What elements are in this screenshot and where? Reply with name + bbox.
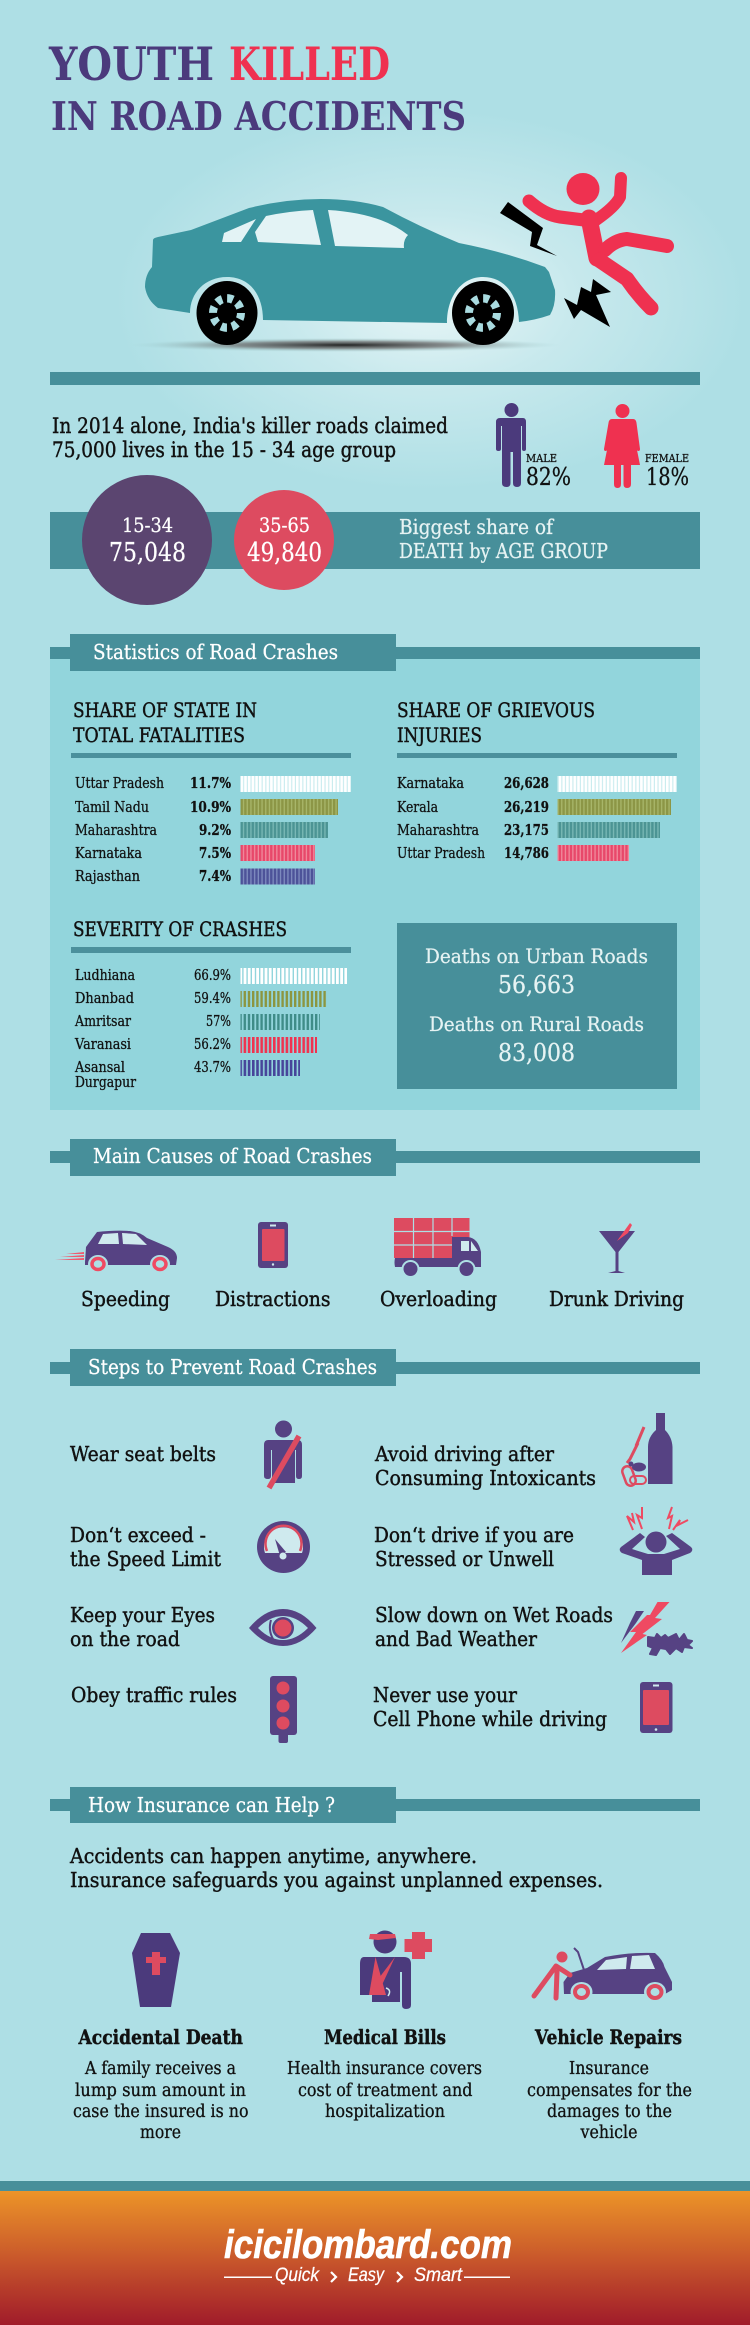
- chart: share of state in total fatalities: TOTAL FATALITIES: [73, 724, 245, 747]
- chart: share of grievous injuries: Karnataka: [397, 774, 464, 792]
- icon: person with seat belt: [264, 1420, 302, 1488]
- step: cell phone: [373, 1682, 672, 1733]
- insurance: vehicle repairs: Insurance: [569, 2059, 649, 2079]
- insurance: vehicle repairs: damages to the: [547, 2102, 672, 2122]
- impact bolts: [500, 202, 557, 256]
- male stat: 82%: [526, 463, 571, 491]
- intro statement: [52, 414, 448, 462]
- cause: distractions: Distractions: [215, 1287, 330, 1311]
- step: speed limit: the Speed Limit: [70, 1547, 222, 1571]
- icon: mobile phone: [640, 1682, 672, 1733]
- chart: share of grievous injuries: INJURIES: [397, 724, 482, 747]
- step: stressed or unwell: [374, 1507, 692, 1575]
- cause: overloading: [380, 1218, 497, 1311]
- section header: main causes: [50, 1139, 700, 1176]
- chart: severity of crashes: Dhanbad: [75, 989, 134, 1007]
- intro statement: 75,000 lives in the 15 - 34 age group: [52, 438, 396, 462]
- step: avoid intoxicants: [374, 1413, 672, 1490]
- chart: severity of crashes: Varanasi: [74, 1035, 131, 1053]
- insurance: accidental death: [73, 1933, 248, 2143]
- chart: share of state in total fatalities: 10.9%: [190, 798, 231, 816]
- chart: severity of crashes: Durgapur: [75, 1073, 137, 1091]
- cause: speeding: Speeding: [81, 1287, 170, 1311]
- step: seat belts: Wear seat belts: [70, 1442, 216, 1466]
- icon: male figure: [496, 403, 526, 487]
- insurance: medical bills: hospitalization: [325, 2102, 445, 2122]
- rear wheel: [196, 281, 258, 345]
- insurance: accidental death: case the insured is no: [73, 2102, 248, 2122]
- insurance: vehicle repairs: compensates for the: [527, 2081, 692, 2101]
- panel: statistics of road crashes: [50, 634, 700, 1110]
- icon: speeding car: [55, 1231, 177, 1273]
- chart: severity of crashes: [71, 918, 351, 1091]
- step: wet roads and bad weather: Slow down on Wet Roads: [375, 1603, 613, 1627]
- chart: share of state in total fatalities: SHARE OF STATE IN: [73, 699, 257, 722]
- car windows: [222, 210, 408, 248]
- icon: mobile phone: [258, 1222, 288, 1268]
- chart: share of state in total fatalities: Uttar Pradesh: [75, 774, 164, 792]
- circle: age 35-65: [234, 490, 334, 590]
- insurance intro: Insurance safeguards you against unplanned expenses.: [70, 1868, 603, 1892]
- insurance: medical bills: Medical Bills: [324, 2025, 446, 2049]
- step: avoid intoxicants: Consuming Intoxicants: [375, 1466, 596, 1490]
- circle: age 15-34: 75,048: [109, 538, 186, 568]
- circle: age 35-65: 35-65: [259, 513, 310, 537]
- icon: eye: [249, 1609, 316, 1646]
- chart: share of state in total fatalities: 7.4%: [199, 867, 231, 885]
- illustration: car hitting a pedestrian: [130, 173, 667, 352]
- female stat: 18%: [646, 463, 689, 491]
- icon: lightning and storm: [621, 1602, 692, 1655]
- female stat: FEMALE: [645, 452, 689, 465]
- title: [48, 37, 466, 140]
- title: KILLED: [229, 37, 390, 91]
- icon: martini glass: [599, 1223, 635, 1273]
- cause: overloading: Overloading: [380, 1287, 497, 1311]
- section header: steps to prevent: [50, 1349, 700, 1386]
- car shadow: [130, 338, 560, 352]
- male stat: [496, 403, 571, 491]
- step: eyes on the road: on the road: [70, 1627, 180, 1651]
- chart: share of grievous injuries: 26,628: [504, 774, 549, 792]
- step: traffic rules: Obey traffic rules: [71, 1683, 237, 1707]
- chart: share of grievous injuries: 26,219: [504, 798, 549, 816]
- section header: how insurance can help: [50, 1787, 700, 1823]
- tagline: [224, 2265, 510, 2286]
- cause: drunk driving: [549, 1223, 684, 1311]
- step: stressed or unwell: Stressed or Unwell: [375, 1547, 554, 1571]
- chart: severity of crashes: Asansal: [74, 1058, 125, 1076]
- front wheel: [452, 281, 514, 345]
- female stat: [604, 404, 689, 491]
- car body: [145, 199, 555, 323]
- insurance: medical bills: cost of treatment and: [298, 2081, 472, 2101]
- step: cell phone: Never use your: [373, 1683, 517, 1707]
- insurance: accidental death: more: [140, 2123, 181, 2143]
- tagline: Quick: [275, 2265, 320, 2286]
- section header: steps to prevent: Steps to Prevent Road Crashes: [88, 1355, 377, 1379]
- step: wet roads and bad weather: and Bad Weather: [375, 1627, 537, 1651]
- chart: share of grievous injuries: 23,175: [504, 821, 549, 839]
- section header: main causes: Main Causes of Road Crashes: [93, 1144, 372, 1168]
- chart: share of state in total fatalities: [71, 699, 351, 885]
- chart: share of state in total fatalities: Maharashtra: [75, 821, 157, 839]
- tagline: Easy: [348, 2265, 385, 2286]
- male stat: MALE: [526, 452, 557, 465]
- callout: urban and rural deaths: 83,008: [498, 1039, 575, 1067]
- chart: severity of crashes: 59.4%: [194, 989, 231, 1007]
- chart: share of state in total fatalities: 11.7%: [190, 774, 231, 792]
- divider bar: [50, 372, 700, 385]
- icon: injured person with medical cross: [360, 1930, 432, 2009]
- circle: age 35-65: 49,840: [247, 538, 322, 568]
- circle: age 15-34: [82, 475, 212, 605]
- icon: coffin: [132, 1933, 180, 2007]
- step: speed limit: [70, 1521, 310, 1573]
- insurance: medical bills: Health insurance covers: [287, 2059, 482, 2079]
- chart: share of grievous injuries: [397, 699, 677, 862]
- chart: severity of crashes: 56.2%: [194, 1035, 231, 1053]
- icon: stressed person: [620, 1507, 692, 1575]
- step: eyes on the road: Keep your Eyes: [70, 1603, 215, 1627]
- step: cell phone: Cell Phone while driving: [373, 1707, 607, 1731]
- intro statement: In 2014 alone, India's killer roads claimed: [52, 414, 448, 438]
- insurance: vehicle repairs: Vehicle Repairs: [534, 2025, 682, 2049]
- title: IN ROAD ACCIDENTS: [51, 94, 466, 140]
- chart: share of state in total fatalities: 9.2%: [199, 821, 231, 839]
- cause: distractions: [215, 1222, 330, 1311]
- insurance: accidental death: Accidental Death: [78, 2025, 243, 2049]
- chart: share of state in total fatalities: 7.5%: [199, 844, 231, 862]
- insurance: vehicle repairs: [527, 1948, 692, 2143]
- step: traffic rules: [71, 1676, 297, 1743]
- icon: person repairing car: [534, 1948, 672, 2002]
- chart: severity of crashes: 66.9%: [194, 966, 231, 984]
- chart: share of state in total fatalities: Rajasthan: [75, 867, 140, 885]
- chart: severity of crashes: 43.7%: [194, 1058, 231, 1076]
- step: speed limit: Don‘t exceed -: [70, 1523, 206, 1547]
- chart: share of state in total fatalities: Karnataka: [75, 844, 142, 862]
- cause: speeding: [55, 1231, 177, 1311]
- icon: bottle, syringe and pills: [621, 1413, 672, 1487]
- section header: statistics: Statistics of Road Crashes: [93, 640, 338, 664]
- band caption: DEATH by AGE GROUP: [399, 539, 608, 563]
- chart: severity of crashes: 57%: [206, 1012, 231, 1030]
- circle: age 15-34: 15-34: [122, 513, 173, 537]
- footer: [0, 2181, 750, 2325]
- step: eyes on the road: [70, 1603, 316, 1651]
- icon: female figure: [604, 404, 640, 488]
- chart: severity of crashes: Ludhiana: [75, 966, 135, 984]
- tagline: Smart: [414, 2265, 463, 2286]
- step: seat belts: [70, 1420, 302, 1488]
- chart: share of grievous injuries: 14,786: [504, 844, 549, 862]
- band caption: Biggest share of: [399, 515, 554, 539]
- band caption: [399, 515, 608, 563]
- insurance: medical bills: [287, 1930, 482, 2122]
- chart: share of grievous injuries: SHARE OF GRIEVOUS: [397, 699, 595, 722]
- section header: statistics: [50, 634, 700, 671]
- callout: urban and rural deaths: Deaths on Urban Roads: [425, 944, 648, 968]
- icon: overloaded truck: [394, 1218, 481, 1278]
- insurance intro: Accidents can happen anytime, anywhere.: [69, 1844, 477, 1868]
- callout: urban and rural deaths: [397, 923, 677, 1089]
- chart: share of grievous injuries: Uttar Pradesh: [397, 844, 485, 862]
- insurance: vehicle repairs: vehicle: [580, 2123, 638, 2143]
- callout: urban and rural deaths: 56,663: [498, 971, 575, 999]
- step: wet roads and bad weather: [375, 1602, 692, 1655]
- insurance: accidental death: lump sum amount in: [75, 2081, 246, 2101]
- chart: share of grievous injuries: Kerala: [397, 798, 438, 816]
- insurance intro: [69, 1844, 603, 1892]
- age group band: [50, 475, 700, 605]
- chart: share of grievous injuries: Maharashtra: [397, 821, 479, 839]
- cause: drunk driving: Drunk Driving: [549, 1287, 684, 1311]
- step: avoid intoxicants: Avoid driving after: [374, 1442, 554, 1466]
- chart: severity of crashes: SEVERITY OF CRASHES: [73, 918, 287, 941]
- chart: share of state in total fatalities: Tamil Nadu: [75, 798, 149, 816]
- step: stressed or unwell: Don‘t drive if you are: [374, 1523, 574, 1547]
- icon: traffic light: [270, 1676, 297, 1743]
- icon: speedometer: [257, 1521, 310, 1573]
- falling person: [529, 173, 667, 308]
- callout: urban and rural deaths: Deaths on Rural Roads: [429, 1012, 644, 1036]
- insurance: accidental death: A family receives a: [84, 2059, 236, 2079]
- chart: severity of crashes: Amritsar: [74, 1012, 132, 1030]
- section header: how insurance can help: How Insurance can Help ?: [88, 1793, 335, 1817]
- logo text: icicilombard.com: [224, 2223, 512, 2267]
- title: YOUTH: [48, 37, 214, 91]
